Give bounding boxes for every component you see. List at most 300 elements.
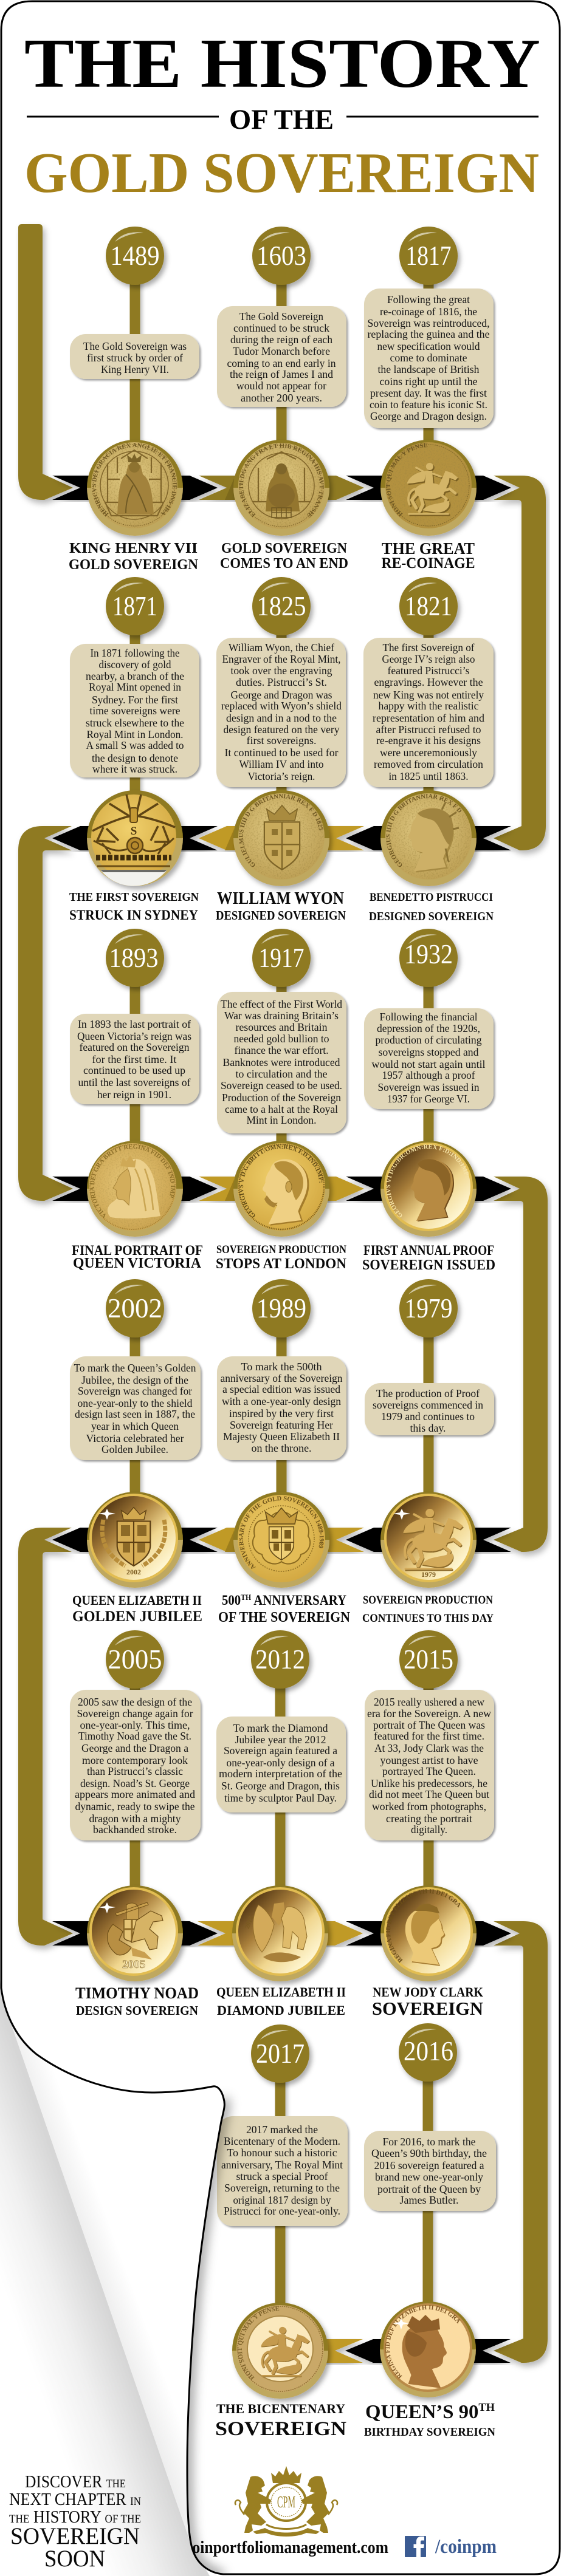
text box 1871: time sovereigns were bbox=[90, 705, 181, 717]
call to action on flap: NEXT CHAPTER IN bbox=[9, 2490, 141, 2509]
text box 1989: To mark the 500th bbox=[241, 1361, 322, 1373]
text box 2012 bbox=[216, 1717, 346, 1812]
coin: 1979 St George proof bbox=[380, 1492, 477, 1588]
timeline track: start to row 1 bbox=[18, 224, 73, 500]
year badge 1871: 1871 bbox=[112, 591, 157, 621]
coin: King Henry VII sovereign: HENRICVS DEI GRACIA REX ANGLIE ET FRANCIE DNS IBAR bbox=[92, 443, 177, 517]
panel: 2015 bbox=[365, 1630, 494, 2019]
facebook handle: /coinpm bbox=[435, 2536, 497, 2558]
text box 2015: era for the Sovereign. A new bbox=[367, 1707, 491, 1720]
text box 1821: removed from circulation bbox=[374, 758, 483, 770]
year badge 1817: 1817 bbox=[406, 241, 451, 271]
text box 2012: St. George and Dragon, this bbox=[221, 1780, 340, 1792]
year badge 2016 bbox=[399, 2023, 457, 2082]
panel: 2005 bbox=[70, 1630, 201, 2018]
timeline track: row 5 to row 6 bbox=[494, 1921, 548, 2363]
year badge 2005: 2005 bbox=[108, 1644, 162, 1675]
text box 2015: youngest artist to have bbox=[380, 1754, 478, 1766]
coin: 1979 St George proof: 1979 bbox=[421, 1570, 436, 1579]
label: first sovereign Sydney: THE FIRST SOVEREIGN bbox=[69, 890, 199, 904]
panel: 1825 bbox=[216, 577, 349, 920]
panel: 1821 bbox=[363, 577, 496, 921]
text box 2002: Jubilee, the design of the bbox=[81, 1374, 188, 1386]
text box 1989: a special edition was issued bbox=[222, 1383, 340, 1395]
title: OF THE bbox=[229, 104, 334, 135]
text box 2016: Queen’s 90th birthday, the bbox=[371, 2147, 487, 2159]
text box 2017 bbox=[217, 2116, 348, 2226]
text box 1825: design and in a nod to the bbox=[226, 712, 337, 724]
year badge 2015: 2015 bbox=[404, 1644, 453, 1675]
label: 500th anniversary: 500 bbox=[222, 1593, 243, 1608]
year badge 2002 bbox=[106, 1279, 164, 1338]
label: William Wyon bbox=[216, 889, 346, 923]
text box 1821: featured Pistrucci’s bbox=[388, 664, 470, 677]
text box 1989 bbox=[217, 1356, 346, 1460]
year badge 1825 bbox=[252, 577, 311, 635]
coin: 1817 St George: HONI SOIT QUI MAL Y PENSE bbox=[386, 443, 428, 517]
text box 2016: brand new one-year-only bbox=[375, 2171, 483, 2183]
coin: Queen Victoria veiled head bbox=[87, 1141, 187, 1243]
text box 2017: struck a special Proof bbox=[236, 2170, 328, 2182]
text box 1989: on the throne. bbox=[252, 1442, 311, 1454]
coin: Sydney mint close-up: S bbox=[131, 825, 137, 838]
label: comes to an end: COMES TO AN END bbox=[220, 556, 348, 572]
label: bicentenary: THE BICENTENARY bbox=[216, 2401, 345, 2416]
text box 1603: another 200 years. bbox=[241, 392, 322, 404]
label: production continues: CONTINUES TO THIS DAY bbox=[362, 1612, 494, 1625]
text box 1603: coming to an end early in bbox=[227, 357, 336, 369]
label: 500th anniversary: ANNIVERSARY bbox=[251, 1593, 346, 1608]
panel: 1603 bbox=[217, 227, 349, 568]
text box 1825: George and Dragon was bbox=[231, 689, 332, 701]
text box 1871: struck elsewhere to the bbox=[86, 717, 184, 729]
label: King Henry VII bbox=[69, 543, 198, 570]
text box 1979 bbox=[365, 1383, 494, 1435]
label: Benedetto Pistrucci bbox=[369, 891, 494, 923]
year badge 1489: 1489 bbox=[111, 241, 159, 271]
footer website: coinportfoliomanagement.com bbox=[185, 2538, 388, 2557]
coin: 1817 St George bbox=[380, 440, 480, 542]
text box 1817: present day. It was the first bbox=[370, 387, 487, 399]
text box 2015: worked from photographs, bbox=[372, 1800, 486, 1812]
logo: CPM crest: CPM bbox=[277, 2493, 295, 2511]
label: diamond jubilee: DIAMOND JUBILEE bbox=[217, 2003, 345, 2018]
coin: 2016 James Butler: REGINA FID DEF ELIZABETH II DEI GRA bbox=[385, 2305, 459, 2379]
coin: 500th anniversary: ANNIVERSARY OF THE GOLD SOVEREIGN 1489-1989 bbox=[239, 1496, 324, 1569]
text box 1871: Royal Mint opened in bbox=[89, 681, 181, 693]
label: final portrait bbox=[72, 1243, 203, 1271]
text box 1603: would not appear for bbox=[236, 380, 326, 392]
text box 1603 bbox=[217, 306, 346, 407]
year badge 2002: 2002 bbox=[108, 1293, 162, 1324]
timeline track: row 1 to row 2 bbox=[494, 476, 546, 850]
text box 1917 bbox=[217, 992, 346, 1133]
label: the great re-coinage: THE GREAT bbox=[382, 539, 475, 558]
timeline track: row 2 to row 3 bbox=[18, 826, 73, 1201]
text box 2002 bbox=[70, 1356, 201, 1460]
text box 1825: William IV and into bbox=[239, 758, 324, 770]
year badge 2012: 2012 bbox=[255, 1644, 305, 1675]
text box 2017: Pistrucci for one-year-only. bbox=[224, 2205, 340, 2217]
label: Benedetto Pistrucci: BENEDETTO PISTRUCCI bbox=[370, 891, 493, 904]
text box 2002: year in which Queen bbox=[91, 1420, 179, 1432]
text box 2017: anniversary, The Royal Mint bbox=[221, 2159, 343, 2171]
text box 1932: Sovereign was issued in bbox=[378, 1081, 480, 1093]
text box 1825: took over the engraving bbox=[231, 664, 332, 677]
background: curled flap bbox=[1, 1980, 243, 2551]
background: page-curl shadow bbox=[0, 1980, 210, 2576]
text box 1979: sovereigns commenced in bbox=[373, 1399, 483, 1411]
text box 1817: new specification would bbox=[377, 340, 480, 352]
label: Jody Clark: SOVEREIGN bbox=[372, 1998, 483, 2019]
text box 1989: Sovereign featuring Her bbox=[230, 1419, 333, 1431]
year badge 1989: 1989 bbox=[256, 1293, 306, 1324]
text box 2017: 2017 marked the bbox=[246, 2123, 318, 2136]
text box 1825 bbox=[216, 638, 346, 787]
text box 2012: Jubilee year the 2012 bbox=[235, 1734, 326, 1746]
text box 1917: Banknotes were introduced bbox=[222, 1056, 340, 1068]
label: Timothy Noad: TIMOTHY NOAD bbox=[75, 1984, 199, 2002]
text box 2005: dragon with a mighty bbox=[89, 1812, 181, 1825]
text box 1871: A small S was added to bbox=[86, 739, 184, 751]
text box 2012: time by sculptor Paul Day. bbox=[224, 1792, 337, 1804]
label: final portrait: FINAL PORTRAIT OF bbox=[72, 1243, 203, 1258]
text box 2002: Sovereign was changed for bbox=[78, 1385, 192, 1397]
text box 1871: where it was struck. bbox=[92, 763, 177, 775]
year badge 1932: 1932 bbox=[404, 939, 453, 969]
text box 2015: featured for the first time. bbox=[374, 1730, 484, 1742]
text box 1932: would not start again until bbox=[372, 1058, 486, 1070]
label: production continues: SOVEREIGN PRODUCTION bbox=[363, 1594, 493, 1607]
text box 2015: digitally. bbox=[411, 1823, 447, 1836]
text box 1893: Queen Victoria’s reign was bbox=[77, 1030, 191, 1042]
text box 1871: Sydney. For the first bbox=[92, 694, 178, 706]
text box 2015: portrayed The Queen. bbox=[382, 1765, 476, 1777]
text box 1917: to circulation and the bbox=[236, 1068, 328, 1080]
text box 2017: To honour such a historic bbox=[227, 2147, 337, 2159]
text box 1871: nearby, a branch of the bbox=[86, 670, 184, 682]
coin: 2017 bicentenary bbox=[232, 2303, 328, 2399]
text box 1932: sovereigns stopped and bbox=[378, 1046, 479, 1058]
text box 2015: Unlike his predecessors, he bbox=[371, 1777, 487, 1789]
text box 1893: continued to be used up bbox=[83, 1064, 185, 1076]
year badge 1603: 1603 bbox=[256, 241, 306, 271]
text box 1817: Following the great bbox=[387, 293, 470, 306]
year badge 1893 bbox=[106, 929, 164, 987]
text box 2005: 2005 saw the design of the bbox=[78, 1696, 192, 1708]
text box 1893: her reign in 1901. bbox=[97, 1088, 171, 1101]
text box 2005: one-year-only. This time, bbox=[80, 1719, 190, 1731]
coin: 2015 Jody Clark: REGINA FID DEF ELIZABETH II DEI GRA bbox=[386, 1889, 461, 1963]
panel: 2016 bbox=[364, 2023, 496, 2439]
text box 1825: William Wyon, the Chief bbox=[229, 641, 334, 654]
text box 1817: the landscape of British bbox=[378, 363, 480, 375]
year badge 1603 bbox=[252, 227, 311, 285]
text box 1893: for the first time. It bbox=[92, 1053, 177, 1065]
text box 2005: Timothy Noad gave the St. bbox=[78, 1730, 191, 1742]
text box 2005: than Pistrucci’s classic bbox=[87, 1765, 183, 1777]
coin: 2005 Timothy Noad: 2005 bbox=[122, 1958, 145, 1971]
year badge 1821: 1821 bbox=[405, 591, 452, 621]
panel: 2002 bbox=[70, 1279, 202, 1625]
text box 1917: finance the war effort. bbox=[235, 1044, 328, 1056]
text box 1893: featured on the Sovereign bbox=[79, 1041, 190, 1053]
label: first annual proof: SOVEREIGN ISSUED bbox=[362, 1257, 495, 1273]
text box 1821: re-engrave it his designs bbox=[376, 734, 481, 746]
label: diamond jubilee: QUEEN ELIZABETH II bbox=[216, 1984, 346, 2000]
text box 1917: The effect of the First World bbox=[221, 998, 342, 1010]
year badge 1871 bbox=[106, 577, 164, 635]
text box 1821: in 1825 until 1863. bbox=[389, 770, 468, 782]
text box 2016: For 2016, to mark the bbox=[383, 2136, 476, 2148]
year badge 1821 bbox=[399, 577, 458, 635]
text box 2002: design last seen in 1887, the bbox=[75, 1408, 195, 1420]
label: first sovereign Sydney: STRUCK IN SYDNEY bbox=[69, 907, 198, 923]
ribbon row 1 bbox=[52, 476, 511, 500]
text box 1603: the reign of James I and bbox=[230, 368, 333, 380]
timeline track: row 3 to row 4 bbox=[494, 1177, 548, 1552]
icon: facebook bbox=[405, 2536, 426, 2557]
panel: 1893 bbox=[70, 929, 202, 1270]
label: William Wyon: WILLIAM WYON bbox=[217, 889, 344, 908]
text box 2015: portrait of The Queen was bbox=[373, 1719, 485, 1731]
label: production stops: SOVEREIGN PRODUCTION bbox=[216, 1243, 346, 1256]
call to action on flap bbox=[9, 2472, 141, 2572]
coin: 2002 shield: 2002 bbox=[126, 1568, 141, 1576]
label: the great re-coinage: RE-COINAGE bbox=[382, 555, 475, 572]
year badge 2017 bbox=[251, 2024, 309, 2083]
text box 1821: happy with the realistic bbox=[378, 700, 479, 712]
label: Queen's 90th: BIRTHDAY SOVEREIGN bbox=[364, 2425, 496, 2439]
panel: 2017 bbox=[215, 2024, 348, 2440]
text box 2005: Sovereign change again for bbox=[77, 1707, 193, 1720]
year badge 1989 bbox=[252, 1279, 311, 1338]
text box 2016: 2016 sovereign featured a bbox=[374, 2159, 484, 2171]
year badge 2015 bbox=[399, 1630, 458, 1689]
text box 1917: Mint in London. bbox=[247, 1114, 316, 1126]
label: 500th anniversary bbox=[218, 1593, 351, 1625]
label: golden jubilee: QUEEN ELIZABETH II bbox=[72, 1593, 202, 1608]
text box 1603: Tudor Monarch before bbox=[233, 345, 330, 357]
ribbon row 3 bbox=[52, 1177, 511, 1201]
year badge 1893: 1893 bbox=[109, 943, 158, 973]
label: Jody Clark: NEW JODY CLARK bbox=[373, 1984, 483, 2000]
text box 1979: this day. bbox=[410, 1422, 446, 1434]
coin: George V: GEORGIVS V D.G.BRITT:OMN:REX F.D.IND:IMP: bbox=[239, 1144, 323, 1217]
text box 1932: 1937 for George VI. bbox=[387, 1093, 470, 1105]
text box 1989: Majesty Queen Elizabeth II bbox=[223, 1430, 340, 1443]
text box 1825: Victoria’s reign. bbox=[248, 770, 315, 782]
text box 2002: Golden Jubilee. bbox=[102, 1443, 168, 1455]
coin: George VI proof bbox=[380, 1141, 480, 1243]
text box 1932: depression of the 1920s, bbox=[377, 1022, 480, 1034]
text box 1979: 1979 and continues to bbox=[381, 1410, 475, 1423]
label: bicentenary bbox=[215, 2401, 346, 2440]
text box 1871: discovery of gold bbox=[98, 658, 171, 671]
logo: CPM crest bbox=[235, 2466, 337, 2537]
text box 1821: were unceremoniously bbox=[380, 746, 477, 759]
call to action on flap: SOVEREIGN bbox=[10, 2523, 140, 2549]
coin: Wyon shield: GULIELMUS IIII D G BRITANNIAR REX F D 1825 bbox=[239, 794, 323, 867]
text box 1917: Sovereign ceased to be used. bbox=[221, 1079, 342, 1092]
coin: Queen Victoria veiled head: VICTORIA DEI GRA BRITT REGINA FID DEF IND IMP bbox=[90, 1144, 175, 1218]
text box 1932: 1957 although a proof bbox=[382, 1069, 475, 1081]
text box 2016 bbox=[364, 2131, 496, 2211]
panel: 1871 bbox=[69, 577, 199, 923]
text box 2005: design. Noad’s St. George bbox=[80, 1777, 190, 1789]
label: William Wyon: DESIGNED SOVEREIGN bbox=[216, 908, 346, 923]
label: Benedetto Pistrucci: DESIGNED SOVEREIGN bbox=[369, 910, 494, 923]
text box 1821: engravings. However the bbox=[374, 676, 483, 688]
text box 1979: The production of Proof bbox=[376, 1387, 480, 1399]
text box 2005: dynamic, ready to swipe the bbox=[75, 1800, 195, 1812]
label: King Henry VII: KING HENRY VII bbox=[69, 541, 198, 556]
year badge 1979: 1979 bbox=[405, 1293, 452, 1324]
text box 2016: James Butler. bbox=[400, 2194, 458, 2206]
label: Timothy Noad: DESIGN SOVEREIGN bbox=[76, 2003, 198, 2018]
text box 1871: Royal Mint in London. bbox=[86, 728, 184, 740]
year badge 1489 bbox=[106, 227, 164, 285]
text box 1893: In 1893 the last portrait of bbox=[78, 1018, 191, 1030]
text box 1821: The first Sovereign of bbox=[383, 641, 475, 654]
ribbon row 4 bbox=[52, 1528, 511, 1552]
text box 1821 bbox=[363, 638, 494, 787]
coin: George V bbox=[233, 1141, 334, 1243]
panel: 1932 bbox=[363, 929, 496, 1269]
timeline track: row 4 to row 5 bbox=[18, 1528, 73, 1946]
call to action on flap: THE HISTORY OF THE bbox=[9, 2507, 141, 2527]
text box 2017: original 1817 design by bbox=[233, 2194, 331, 2206]
title: THE HISTORY bbox=[24, 25, 540, 102]
year badge 2012 bbox=[251, 1630, 309, 1689]
text box 1893: until the last sovereigns of bbox=[78, 1076, 191, 1088]
panel: 1917 bbox=[216, 929, 349, 1268]
label: 500th anniversary: OF THE SOVEREIGN bbox=[218, 1610, 351, 1625]
text box 1932: Following the financial bbox=[379, 1011, 478, 1023]
year badge 1817 bbox=[399, 227, 458, 285]
text box 2005: backhanded stroke. bbox=[93, 1823, 177, 1836]
ribbon row 5 bbox=[52, 1921, 511, 1946]
text box 1917: Production of the Sovereign bbox=[222, 1092, 341, 1104]
text box 2012: Sovereign again featured a bbox=[224, 1744, 337, 1757]
label: final portrait: QUEEN VICTORIA bbox=[73, 1256, 202, 1271]
coin: Elizabethan sovereign bbox=[233, 440, 334, 542]
text box 1825: Engraver of the Royal Mint, bbox=[222, 653, 340, 665]
year badge 1932 bbox=[399, 929, 458, 987]
text box 1817: George and Dragon design. bbox=[370, 410, 487, 422]
coin: 2012 Paul Day: 2012 bbox=[244, 1916, 255, 1930]
text box 2015: creating the portrait bbox=[386, 1812, 472, 1825]
year badge 1979 bbox=[399, 1279, 458, 1338]
text box 2005: appears more animated and bbox=[75, 1788, 195, 1800]
label: 500th anniversary: TH bbox=[241, 1593, 251, 1602]
text box 2017: Sovereign, returning to the bbox=[224, 2182, 340, 2194]
text box 2012: modern interpretation of the bbox=[219, 1768, 342, 1780]
coin: Sydney mint close-up bbox=[87, 790, 183, 886]
title bbox=[26, 40, 539, 193]
text box 2015 bbox=[365, 1690, 494, 1840]
coin: 2012 Paul Day bbox=[232, 1885, 328, 1981]
coin: 2016 James Butler bbox=[380, 2301, 476, 2397]
text box 2015: At 33, Jody Clark was the bbox=[374, 1742, 484, 1754]
text box 2015: 2015 really ushered a new bbox=[374, 1696, 484, 1708]
panel: 1979 bbox=[362, 1279, 494, 1625]
label: Queen's 90th bbox=[364, 2400, 496, 2439]
year badge 1917: 1917 bbox=[259, 943, 304, 973]
label: production continues bbox=[362, 1594, 494, 1625]
text box 1821: new King was not entirely bbox=[373, 689, 484, 701]
label: Jody Clark bbox=[372, 1984, 483, 2019]
text box 1489: King Henry VII. bbox=[101, 363, 169, 375]
text box 2002: To mark the Queen’s Golden bbox=[74, 1362, 196, 1374]
label: golden jubilee bbox=[72, 1593, 202, 1625]
text box 1825: duties. Pistrucci’s St. bbox=[236, 676, 327, 688]
text box 1989: anniversary of the Sovereign bbox=[220, 1372, 343, 1384]
label: first annual proof bbox=[362, 1243, 495, 1273]
text box 2017: Bicentenary of the Modern. bbox=[224, 2135, 340, 2147]
text box 1825: replaced with Wyon’s shield bbox=[221, 700, 342, 712]
text box 2002: Victoria celebrated her bbox=[86, 1432, 184, 1444]
text box 1817: replacing the guinea and the bbox=[367, 328, 490, 340]
text box 1821: after Pistrucci refused to bbox=[376, 723, 481, 736]
text box 1821: George IV’s reign also bbox=[382, 653, 475, 665]
call to action on flap: SOON bbox=[44, 2546, 105, 2572]
year badge 2017: 2017 bbox=[256, 2038, 305, 2069]
text box 1489: The Gold Sovereign was bbox=[83, 340, 187, 352]
text box 1871 bbox=[70, 644, 199, 777]
text box 1871: In 1871 following the bbox=[90, 647, 180, 659]
ribbon row 2 bbox=[52, 826, 511, 850]
text box 1989: with a one-year-only design bbox=[222, 1395, 341, 1407]
coin: George VI proof: GEORGIVS VI D:G:BR:OMN:REX F:D:IND:IMP: bbox=[386, 1144, 469, 1217]
coin: 2005 Timothy Noad bbox=[87, 1885, 183, 1981]
label: production stops bbox=[216, 1243, 347, 1272]
label: production stops: STOPS AT LONDON bbox=[216, 1256, 347, 1272]
year badge 2005 bbox=[106, 1630, 164, 1689]
year badge 1917 bbox=[252, 929, 311, 987]
coin: 2002 shield bbox=[87, 1492, 183, 1588]
label: diamond jubilee bbox=[216, 1984, 346, 2018]
text box 1932: production of circulating bbox=[376, 1034, 482, 1046]
year badge 2016: 2016 bbox=[404, 2036, 453, 2066]
coin: 2017 bicentenary: HONI SOIT QUI MAL Y PENSE bbox=[238, 2306, 280, 2380]
label: Queen's 90th: TH bbox=[478, 2401, 495, 2413]
text box 1871: the design to denote bbox=[92, 752, 178, 764]
text box 2002: one-year-only to the shield bbox=[78, 1397, 193, 1409]
text box 1817: re-coinage of 1816, the bbox=[380, 306, 477, 318]
text box 1603: during the reign of each bbox=[230, 333, 332, 346]
panel: 1489 bbox=[69, 227, 202, 570]
label: golden jubilee: GOLDEN JUBILEE bbox=[72, 1608, 202, 1625]
title: GOLD SOVEREIGN bbox=[24, 142, 539, 205]
text box 1917: needed gold bullion to bbox=[233, 1033, 329, 1045]
text box 1817: coins right up until the bbox=[379, 375, 478, 388]
text box 1917: War was draining Britain’s bbox=[224, 1010, 339, 1022]
text box 1489 bbox=[70, 334, 199, 379]
label: the great re-coinage bbox=[382, 543, 475, 569]
text box 2016: portrait of the Queen by bbox=[377, 2183, 481, 2195]
text box 1489: first struck by order of bbox=[87, 352, 183, 364]
text box 1603: continued to be struck bbox=[233, 322, 329, 334]
panel: 2012 bbox=[216, 1630, 346, 2018]
label: Queen's 90th: QUEEN’S 90 bbox=[365, 2400, 476, 2422]
coin: 2015 Jody Clark bbox=[380, 1885, 477, 1981]
call to action on flap: DISCOVER THE bbox=[25, 2472, 126, 2492]
text box 1817 bbox=[364, 289, 494, 428]
text box 2012: one-year-only design of a bbox=[226, 1757, 335, 1769]
text box 1817: Sovereign was reintroduced, bbox=[367, 317, 490, 329]
text box 1825: It continued to be used for bbox=[225, 746, 339, 759]
